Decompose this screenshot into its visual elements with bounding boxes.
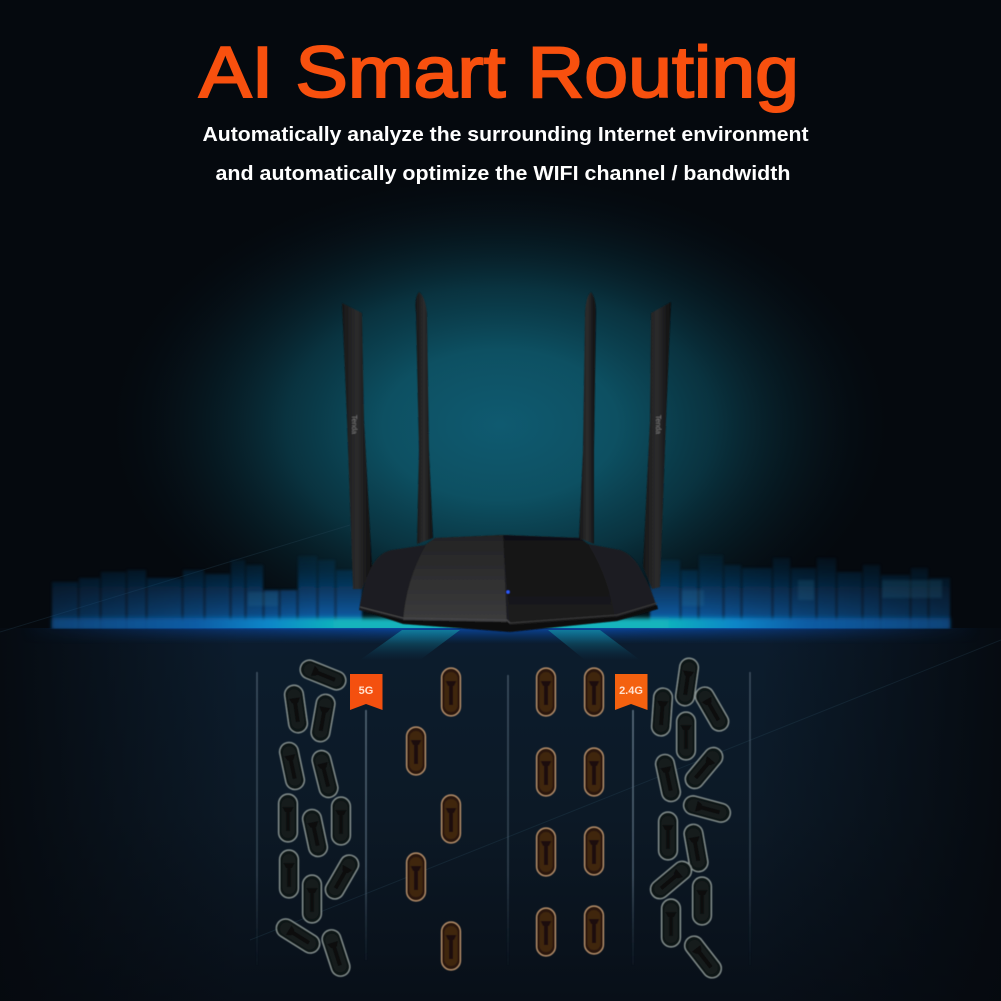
antenna: outer right: Tenda (654, 415, 661, 434)
glowing horizon band (52, 618, 950, 632)
antenna: outer left: Tenda (350, 415, 357, 434)
under-band blue reflection (44, 628, 957, 642)
cars: 2.4G lane (536, 668, 604, 956)
badge: 2.4G (615, 674, 648, 710)
subtitle: and automatically optimize the WIFI channel / bandwidth (216, 162, 790, 185)
background: dark road floor (0, 628, 1001, 1001)
city skyline (52, 555, 950, 628)
cars: congested right lane (647, 657, 733, 982)
perspective light lines (0, 525, 1001, 940)
antenna: outer left (342, 303, 372, 589)
subtitle: Automatically analyze the surrounding Internet environment (202, 123, 809, 146)
light beams beneath router (360, 630, 640, 660)
city skyline: lit building blocks (248, 580, 942, 606)
badge: 2.4G: 2.4G (619, 685, 643, 697)
cars: congested left lane (273, 657, 362, 979)
badge: 5G: 5G (359, 685, 373, 697)
badge: 5G (350, 674, 382, 710)
title: AI Smart Routing (199, 33, 799, 113)
subtitle (202, 123, 809, 185)
antenna: inner left (415, 292, 433, 544)
background: teal glow behind router (110, 175, 890, 675)
background: dark sky (0, 0, 1001, 630)
lane lines (257, 672, 750, 965)
cars: 5G lane (406, 668, 460, 970)
router (342, 292, 671, 632)
antenna: inner right (579, 292, 596, 544)
router body (359, 535, 658, 632)
antenna: outer right (643, 302, 671, 589)
